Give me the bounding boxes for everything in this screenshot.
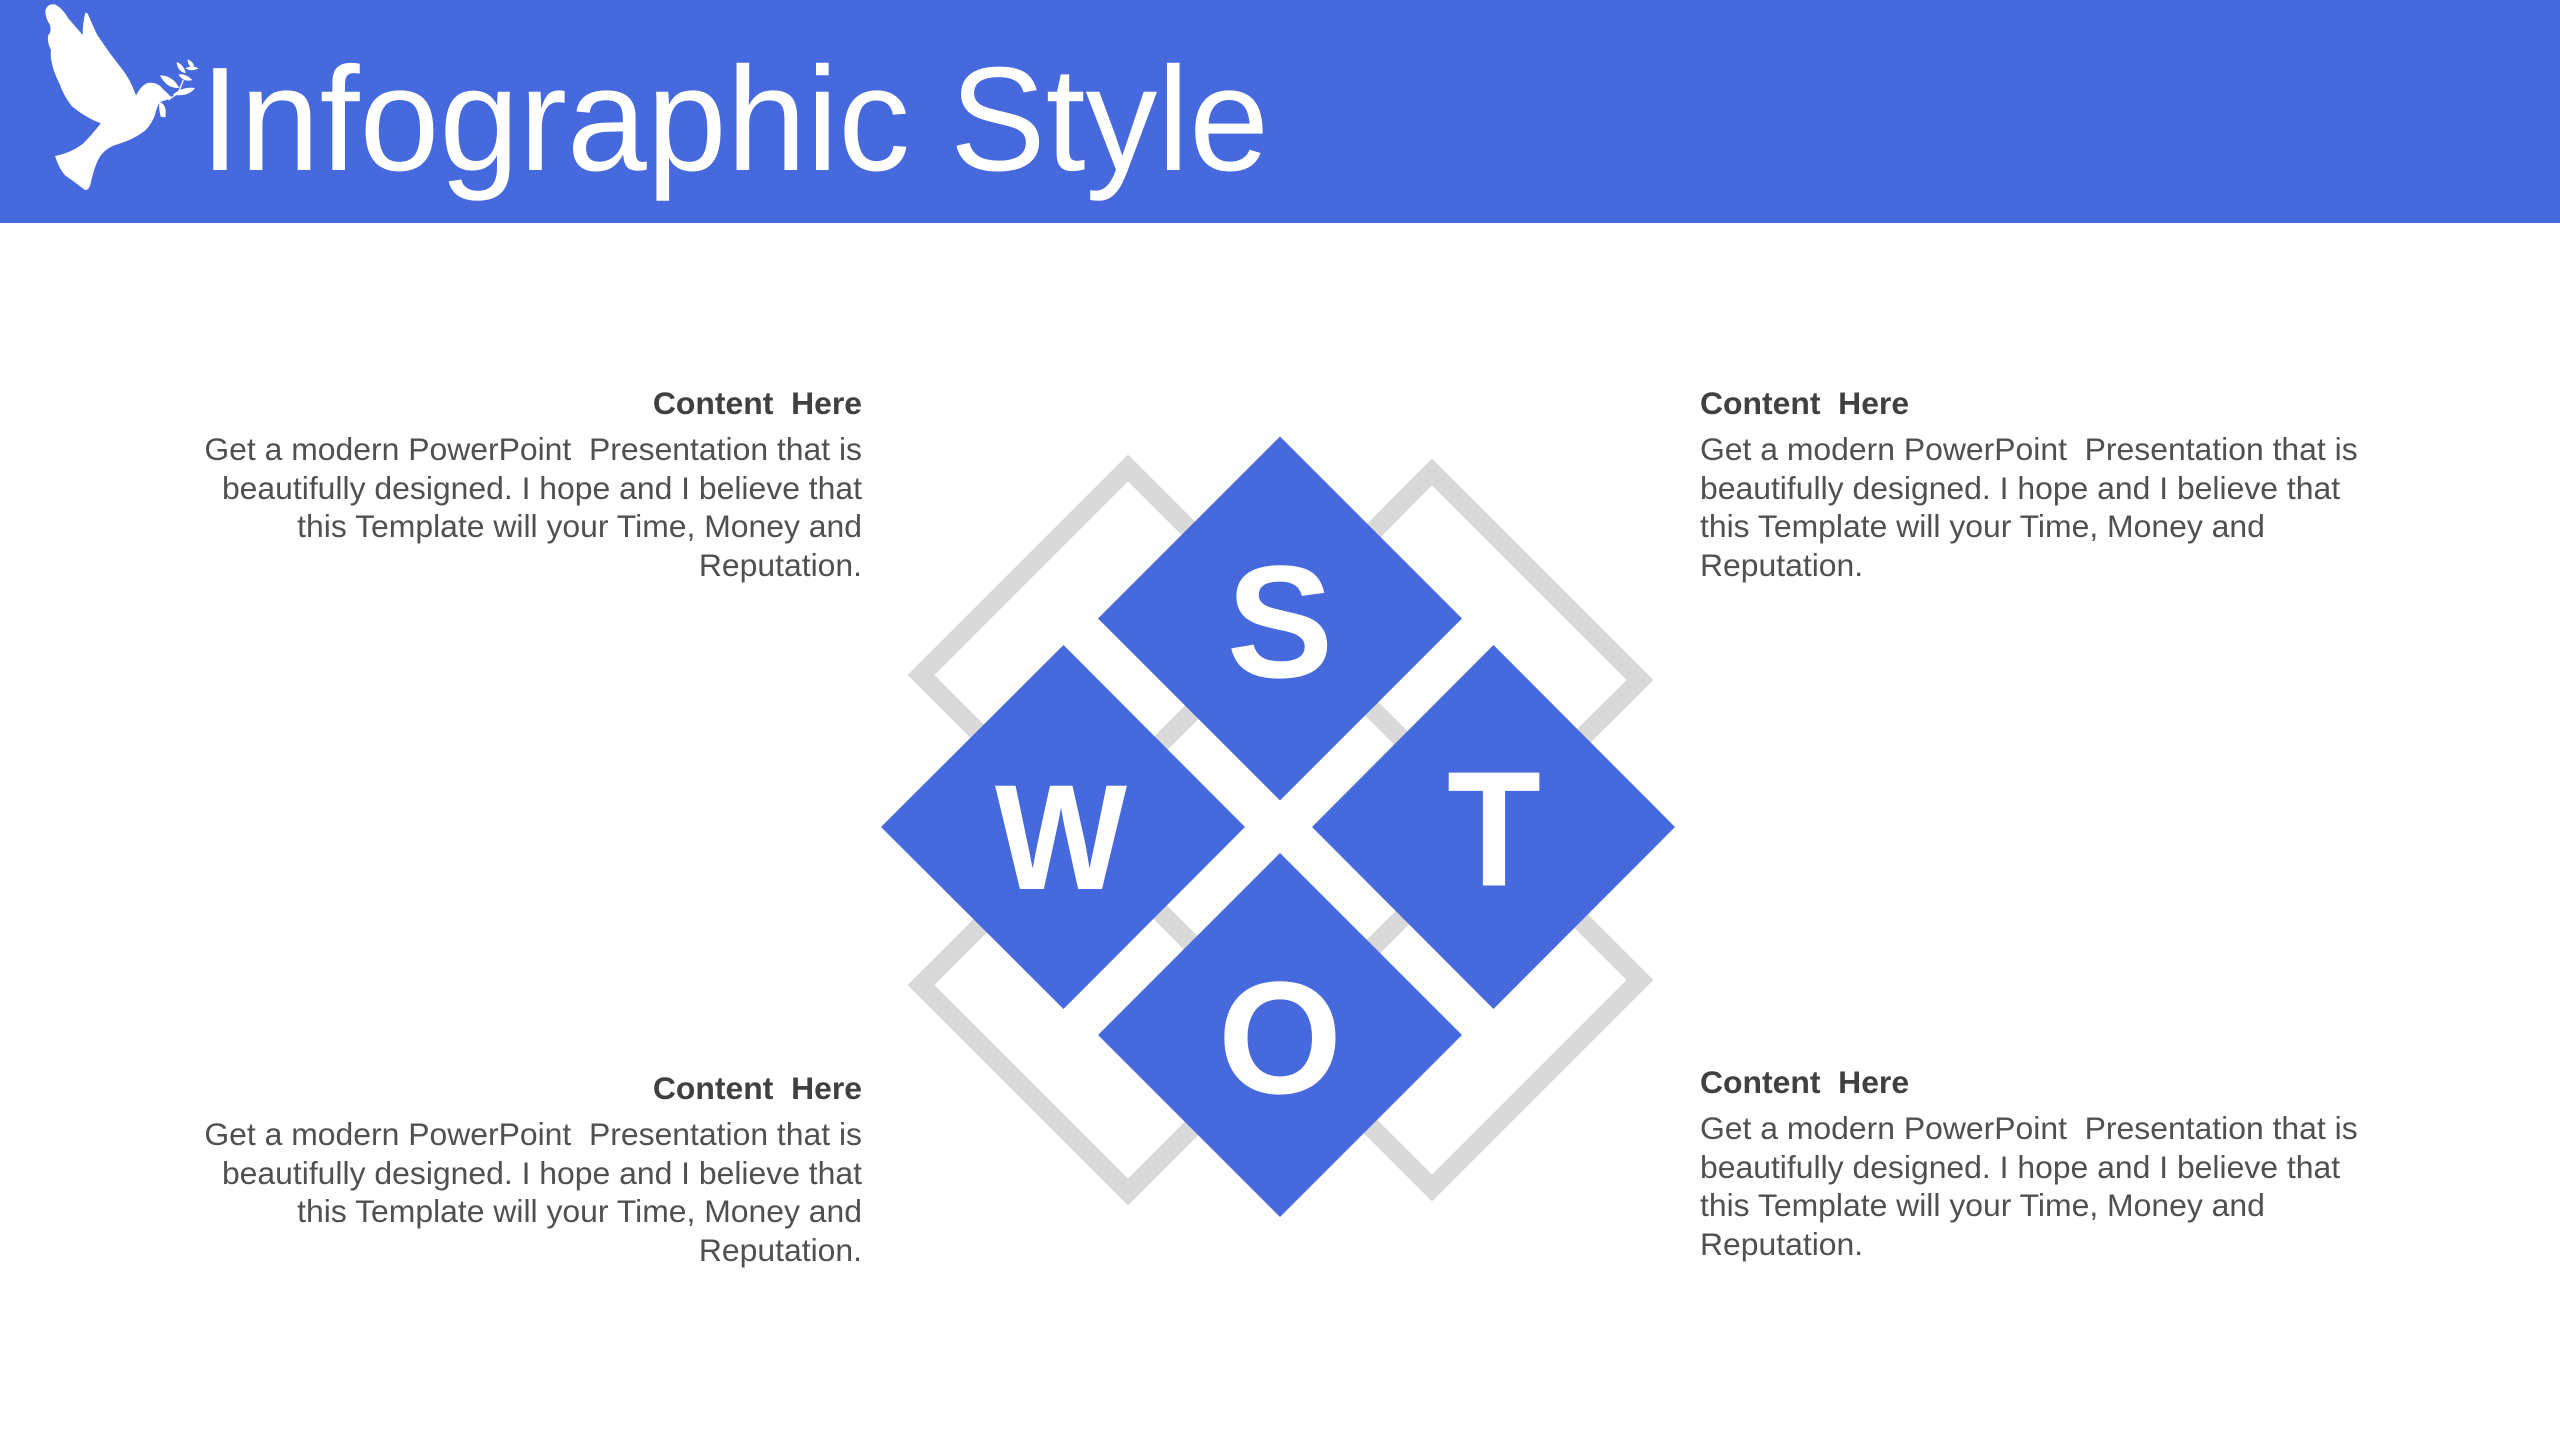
text block: bottom left: Content Here: [653, 1070, 862, 1106]
text block: bottom right: Get a modern PowerPoint Presentation that is: [1700, 1110, 2358, 1146]
title: Infographic Style: [200, 37, 1269, 202]
diamond: T: [1312, 645, 1675, 1009]
text block: top left: Reputation.: [699, 547, 862, 583]
outline: top right: [1284, 472, 1640, 828]
text block: top left: Content Here: [653, 385, 862, 421]
text block: bottom right: Content Here: [1700, 1064, 1909, 1100]
text block: top right: [1700, 385, 2358, 583]
decorative outlined rectangles behind SWOT diamonds: [921, 468, 1640, 1192]
text block: top left: beautifully designed. I hope and I believe that: [222, 470, 862, 506]
diamond: W: W: [995, 753, 1127, 921]
text block: top right: this Template will your Time, Money and: [1700, 508, 2265, 544]
outline: top left: [921, 468, 1282, 829]
text block: bottom left: Reputation.: [699, 1232, 862, 1268]
text block: top right: Reputation.: [1700, 547, 1863, 583]
text block: bottom right: [1700, 1064, 2358, 1262]
text block: bottom left: [204, 1070, 862, 1268]
text block: top right: beautifully designed. I hope and I believe that: [1700, 470, 2340, 506]
header band: [0, 0, 2560, 223]
text block: top left: [204, 385, 862, 583]
icon: dove with olive branch: [45, 4, 199, 190]
diamond: O: O: [1218, 948, 1342, 1127]
text block: bottom right: beautifully designed. I hope and I believe that: [1700, 1149, 2340, 1185]
text block: top right: Content Here: [1700, 385, 1909, 421]
diamond: W: [881, 645, 1245, 1009]
diamond: T: T: [1447, 738, 1541, 920]
text block: bottom left: beautifully designed. I hope and I believe that: [222, 1155, 862, 1191]
text block: bottom left: Get a modern PowerPoint Presentation that is: [204, 1116, 862, 1152]
outline: bottom right: [1282, 830, 1640, 1188]
diamond: O: [1098, 853, 1462, 1217]
text block: bottom left: this Template will your Time, Money and: [297, 1193, 862, 1229]
text block: bottom right: this Template will your Time, Money and: [1700, 1187, 2265, 1223]
text block: top left: Get a modern PowerPoint Presentation that is: [204, 431, 862, 467]
text block: top left: this Template will your Time, Money and: [297, 508, 862, 544]
diamond: S: S: [1227, 532, 1333, 711]
diamond: S: [1098, 436, 1462, 800]
text block: top right: Get a modern PowerPoint Presentation that is: [1700, 431, 2358, 467]
text block: bottom right: Reputation.: [1700, 1226, 1863, 1262]
outline: bottom left: [921, 829, 1284, 1192]
